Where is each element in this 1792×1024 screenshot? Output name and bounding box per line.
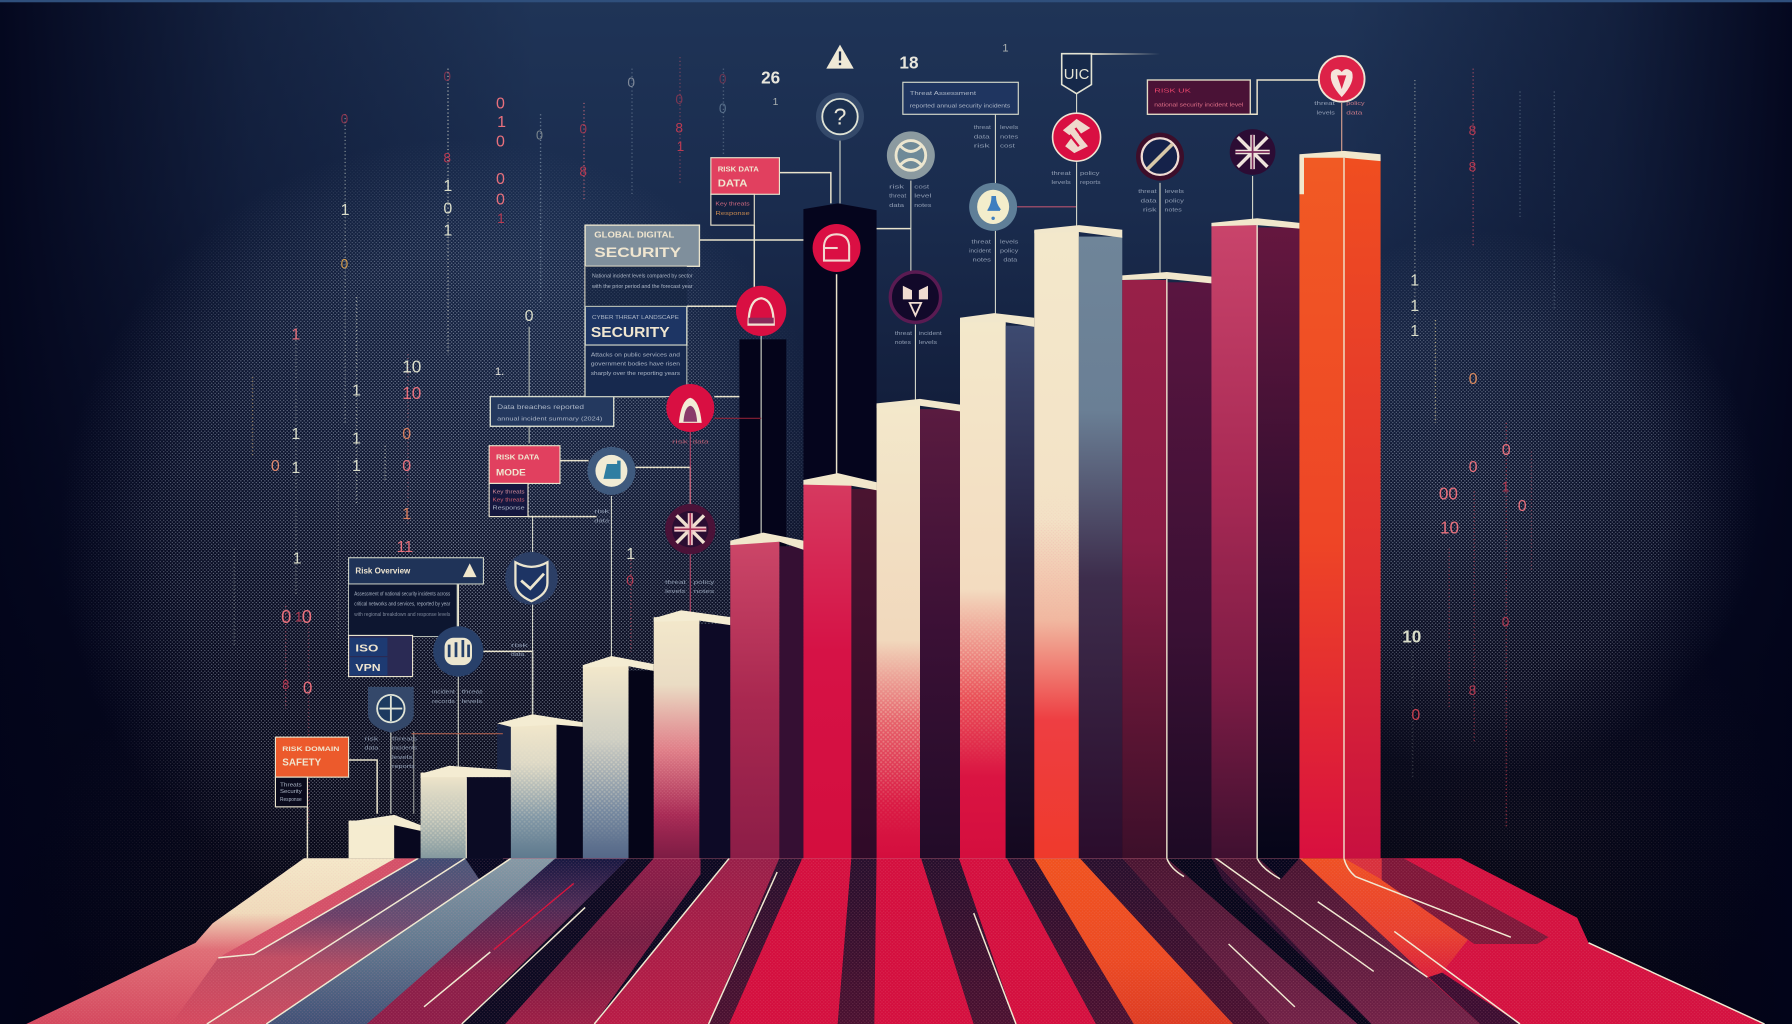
icon: prohibition slash circle (1136, 133, 1184, 181)
callout: pink box, top: RISK DATA (718, 164, 760, 173)
binary rain: right: 1 (1410, 323, 1419, 340)
floor streaks cast by the bars (26, 858, 1765, 1024)
binary rain: right: 8 (1469, 683, 1477, 698)
callout: pink box, mid left (489, 446, 560, 517)
black back bars (497, 203, 877, 770)
binary rain: left: 0 (271, 458, 280, 475)
callout: slate security box: National incident levels compared by sector (592, 274, 693, 280)
small caption labels beside the connector lines: risk (672, 439, 689, 445)
small caption labels beside the connector lines: notes (694, 589, 715, 595)
bar 4 (583, 656, 654, 858)
binary rain: left: 0 (303, 678, 312, 698)
binary rain: left: 0 (579, 122, 587, 137)
binary rain: left: 0 (536, 128, 543, 142)
small caption labels beside the connector lines: threat (895, 331, 913, 337)
binary rain: left: 1 (352, 382, 361, 399)
small caption labels beside the connector lines: levels (1317, 110, 1335, 116)
binary rain: right: 1 (1410, 273, 1419, 290)
binary rain: left: 1 (291, 460, 300, 477)
binary rain: left: 1 (497, 211, 505, 226)
bar 2 (421, 766, 511, 858)
binary rain: left: 0 (443, 69, 451, 84)
binary rain: left: 0 (302, 606, 312, 627)
icon: question mark circle (816, 93, 864, 141)
callout: pink box, top: DATA (718, 178, 748, 189)
small caption labels beside the connector lines: levels (665, 589, 686, 595)
small caption labels beside the connector lines: data (511, 652, 525, 658)
small caption labels beside the connector lines: data (594, 518, 609, 524)
binary rain: right: 0 (1469, 371, 1478, 388)
callout: orange box, lowest bar: Response (280, 797, 302, 803)
floor highlight lines (207, 821, 1765, 1024)
small caption labels beside the connector lines: data (974, 134, 990, 140)
small caption labels beside the connector lines: risk (889, 185, 905, 191)
callout: pink box, mid left: RISK DATA (496, 452, 540, 461)
icon: shield with check (505, 552, 558, 605)
binary rain: right: 8 (1469, 123, 1477, 138)
callout: navy header box with warning: ISO (355, 643, 378, 654)
binary rain: right: 1 (1410, 298, 1419, 315)
binary rain: left: 0 (402, 426, 411, 443)
small caption labels beside the connector lines: levels (919, 340, 938, 346)
small caption labels beside the connector lines: policy (694, 580, 715, 586)
binary rain: left: 1 (443, 178, 452, 195)
small caption labels beside the connector lines: levels (392, 755, 413, 761)
callout: navy header box with warning: Assessment of national security incidents across (354, 591, 450, 597)
bar 3 (497, 714, 583, 858)
icon: dark maroon badge (890, 272, 941, 322)
icon: slate circle with bell (969, 183, 1017, 231)
small caption labels beside the connector lines: threats (392, 737, 418, 743)
small caption labels beside the connector lines: levels (462, 699, 483, 705)
small caption labels beside the connector lines: threat (1138, 189, 1157, 195)
callout: navy caption box: Data breaches reported (497, 404, 584, 411)
small caption labels beside the connector lines: notes (895, 340, 911, 346)
small caption labels beside the connector lines: levels (1051, 180, 1071, 186)
small caption labels beside the connector lines: data (365, 746, 378, 752)
bar 13 (1299, 151, 1381, 858)
bar 11 (1122, 272, 1211, 858)
icon: UIC shield (1062, 54, 1091, 94)
binary rain: left: 0 (281, 606, 291, 627)
bar 9 (960, 313, 1034, 858)
streak: cream to pink sheet (26, 858, 421, 1024)
small caption labels beside the connector lines: data (1141, 198, 1157, 204)
icon: red emblem circle (1053, 113, 1101, 161)
callout: navy header box with warning: VPN (355, 663, 381, 674)
callout: security box: sharply over the reporting years (591, 371, 680, 377)
small caption labels beside the connector lines: policy (1165, 198, 1185, 204)
small caption labels beside the connector lines: threat (1051, 171, 1072, 177)
icon: red printer circle (736, 286, 786, 336)
small caption labels beside the connector lines: threat (971, 239, 992, 245)
small caption labels beside the connector lines: risk (1143, 207, 1157, 213)
callout: navy header box with warning: with regional breakdown and response levels (353, 612, 450, 618)
binary rain: left: 10 (402, 357, 421, 377)
binary rain: right (1402, 69, 1554, 829)
number labels and warning sign: 1 (1002, 42, 1009, 54)
callout: pink box, mid left: MODE (496, 467, 526, 477)
small caption labels beside the connector lines: incident (432, 690, 456, 696)
binary rain: right: 0 (1502, 614, 1510, 629)
callout: maroon box, top right: national security incident level (1154, 102, 1243, 108)
small caption labels beside the connector lines: notes (914, 203, 932, 209)
callout: navy header box with warning: Risk Overview (355, 566, 411, 576)
binary rain: right: 10 (1402, 626, 1421, 646)
callout: navy header box with warning (349, 558, 483, 677)
small caption labels beside the connector lines: risk (511, 643, 529, 649)
small caption labels beside the connector lines: notes (1000, 134, 1019, 140)
small caption labels beside the connector lines: notes (1165, 207, 1182, 213)
callout: security box: Attacks on public services and (591, 353, 680, 359)
small caption labels beside the connector lines: cost (914, 185, 930, 191)
small caption labels beside the connector lines: policy (1000, 249, 1019, 255)
small caption labels beside the connector lines: records (432, 699, 455, 705)
bar 1 (349, 815, 421, 858)
callout: security box (585, 306, 687, 397)
callout: orange box, lowest bar: Security (280, 789, 302, 795)
callout: orange box, lowest bar: SAFETY (282, 758, 321, 769)
callout: pink box, mid left: Key threats (493, 490, 525, 496)
icon: slate shield low (368, 687, 414, 733)
small caption labels beside the connector lines: cost (1000, 143, 1016, 149)
binary rain: left: 0 (719, 71, 727, 86)
small caption labels beside the connector lines: levels (1000, 125, 1019, 131)
binary rain: left: 8 (579, 164, 587, 179)
binary rain: left: 1 (443, 222, 452, 239)
callout: navy caption box: annual incident summary (2024) (497, 417, 602, 423)
bar 10 (1034, 225, 1122, 858)
small caption labels beside the connector lines: data (693, 439, 709, 445)
small caption labels beside the connector lines: policy (1080, 171, 1100, 177)
binary rain: left: 1 (291, 326, 300, 343)
binary rain: left: 1 (402, 506, 411, 523)
number labels and warning sign: 26 (761, 67, 780, 87)
binary rain: left: 0 (525, 308, 534, 325)
small caption labels beside the connector lines: levels (1000, 239, 1019, 245)
wires behind the bars (307, 53, 1342, 858)
binary rain: right: 0 (1518, 498, 1527, 515)
small caption labels beside the connector lines: threat (974, 125, 992, 131)
small caption labels beside the connector lines: risk (974, 143, 990, 149)
binary rain: left: 10 (402, 383, 421, 403)
callout: navy box, top centre: reported annual security incidents (910, 103, 1010, 109)
small caption labels beside the connector lines: risk (594, 509, 610, 515)
binary rain: right: 0 (1411, 707, 1420, 724)
small caption labels beside the connector lines: risk (365, 737, 379, 743)
icon: warning triangle (826, 45, 854, 69)
binary rain: left: 1 (626, 546, 635, 563)
binary rain: left: 1 (293, 550, 302, 567)
callout: orange box, lowest bar: Threats (280, 782, 302, 788)
binary rain: left: 1 (295, 610, 302, 625)
icon: slate cream emblem (887, 131, 935, 179)
binary rain: left: 0 (626, 573, 634, 588)
number labels and warning sign (495, 42, 1009, 378)
binary rain: left: 1 (291, 426, 300, 443)
bar 5 (654, 610, 730, 858)
icon: question mark circle: ? (834, 104, 846, 130)
icon: union flag circle upper (1230, 129, 1275, 175)
small caption labels beside the connector lines: threat (1314, 101, 1336, 107)
bar 6 (730, 533, 803, 858)
binary rain: left: 0 (496, 171, 505, 188)
callout: slate security box: SECURITY (594, 245, 681, 260)
callout: navy box, top centre: Threat Assessment (910, 91, 977, 97)
binary rain: right: 0 (1469, 459, 1478, 476)
binary rain: left: 1 (341, 202, 350, 219)
number labels and warning sign: 1 (773, 97, 779, 108)
small caption labels beside the connector lines: notes (973, 258, 991, 264)
binary rain: right: 1 (1502, 479, 1509, 494)
callout: pink box, mid left: Response (493, 506, 525, 512)
binary rain: left: 0 (443, 201, 452, 218)
callout: orange box, lowest bar: RISK DOMAIN (282, 746, 339, 753)
binary rain: left: 0 (496, 192, 505, 209)
callout: maroon box, top right: RISK UK (1154, 89, 1191, 95)
callout: pink box, top (711, 158, 779, 225)
small caption labels beside the connector lines: threat (462, 690, 483, 696)
small caption labels beside the connector lines: threat (665, 580, 687, 586)
small caption labels beside the connector lines: levels (1165, 189, 1185, 195)
binary rain: left: 0 (402, 458, 411, 475)
callout: slate security box: GLOBAL DIGITAL (594, 231, 674, 240)
binary rain: left (234, 57, 727, 823)
callout: security box: government bodies have risen (591, 362, 680, 368)
binary rain: left: 1 (677, 139, 684, 154)
binary rain: left: 8 (675, 121, 683, 136)
small caption labels beside the connector lines: incident (969, 249, 991, 255)
small caption labels beside the connector lines: policy (1346, 101, 1365, 107)
bar chart: thirteen rising bars (349, 151, 1381, 858)
binary rain: right: 0 (1502, 442, 1511, 459)
callout: pink box, top: Key threats (715, 202, 750, 208)
callout: maroon box, top right (1147, 80, 1250, 114)
binary rain: left: 0 (496, 96, 505, 113)
small caption labels beside the connector lines: reports (392, 764, 415, 770)
small caption labels beside the connector lines: level (914, 194, 931, 200)
small caption labels beside the connector lines: threat (889, 194, 907, 200)
binary rain: left: 0 (719, 101, 727, 116)
binary rain: right: 10 (1440, 518, 1459, 538)
number labels and warning sign: 18 (899, 53, 918, 73)
icon: red heart shield circle (1319, 56, 1365, 102)
bar 7 (803, 473, 877, 858)
icon: union flag circle lower (665, 504, 715, 554)
number labels and warning sign: 1. (495, 366, 504, 378)
icon: emblem circle navy (433, 626, 483, 677)
small caption labels beside the connector lines: data (889, 203, 904, 209)
callout: slate security box (585, 225, 699, 306)
callout: security box: SECURITY (591, 325, 670, 341)
small caption labels beside the connector lines (365, 101, 1365, 770)
small caption labels beside the connector lines: incident (919, 331, 942, 337)
small caption labels beside the connector lines: data (1003, 258, 1017, 264)
binary rain: right: 8 (1469, 159, 1477, 174)
callout: security box: CYBER THREAT LANDSCAPE (592, 315, 679, 321)
small caption labels beside the connector lines: data (1346, 110, 1362, 116)
icon: slate circle with lock (587, 447, 635, 495)
icon: UIC shield: UIC (1064, 67, 1090, 83)
callout: orange box, lowest bar (275, 737, 349, 807)
binary rain: left: 11 (397, 539, 413, 556)
callout: navy header box with warning: critical networks and services, reported by year (354, 602, 450, 608)
binary rain: left: 0 (496, 133, 505, 150)
callout: navy caption box (490, 397, 614, 426)
binary rain: left: 0 (341, 111, 349, 126)
binary rain: left: 1 (497, 114, 506, 131)
icon: red lock circle (813, 224, 861, 272)
callout: pink box, mid left: Key threats (493, 498, 525, 504)
binary rain: left: 8 (282, 678, 289, 692)
callout: navy box, top centre (903, 82, 1018, 114)
small caption labels beside the connector lines: incidents (392, 746, 418, 752)
small caption labels beside the connector lines: reports (1080, 180, 1101, 186)
binary rain: left: 0 (675, 92, 683, 107)
callout: pink box, top: Response (715, 211, 750, 217)
binary rain: left: 1 (352, 458, 361, 475)
binary rain: right: 00 (1439, 483, 1458, 503)
bar 12 (1211, 218, 1299, 858)
binary rain: left: 0 (341, 257, 349, 272)
bar 8 (877, 399, 960, 858)
binary rain: left: 1 (352, 430, 361, 447)
icon: red alert circle (666, 384, 714, 432)
binary rain: left: 0 (627, 75, 635, 90)
callout: slate security box: with the prior period and the forecast year (591, 284, 693, 290)
binary rain: left: 8 (443, 150, 451, 165)
